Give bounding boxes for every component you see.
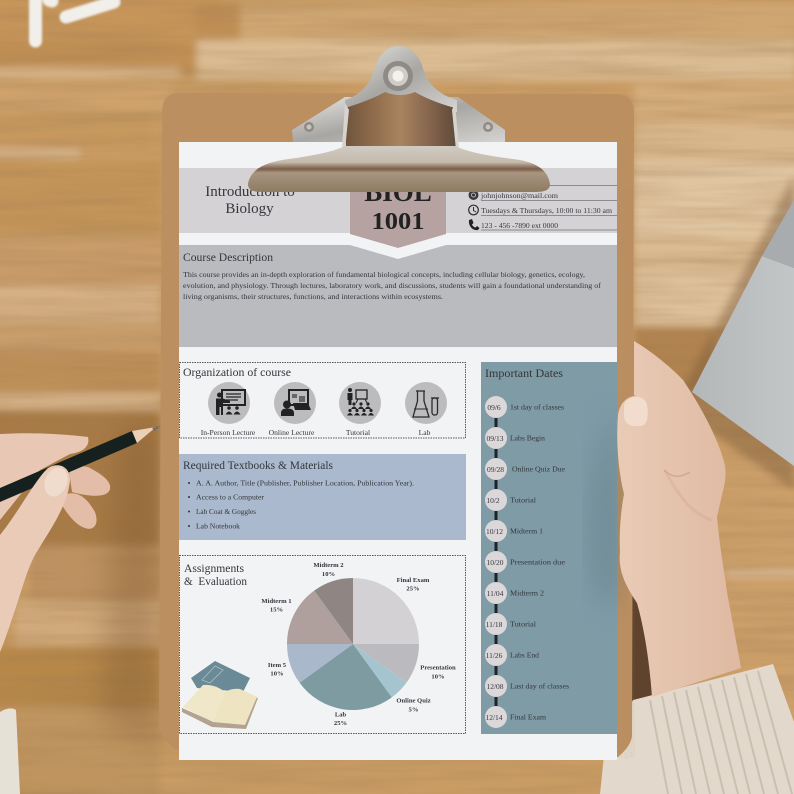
panel: required textbooks and materials xyxy=(179,454,466,540)
section heading: & Evaluation xyxy=(184,574,247,588)
date numbers: 12/08 xyxy=(486,682,504,691)
date labels: Final Exam xyxy=(510,712,546,722)
panel: course description xyxy=(179,245,617,347)
clip bar xyxy=(248,146,550,192)
icon: in-person lecture xyxy=(208,382,250,424)
sweater cuff left xyxy=(0,708,20,794)
icon labels: Tutorial xyxy=(346,428,370,437)
pie labels: 25% xyxy=(406,586,420,592)
pie labels: Item 5 xyxy=(268,662,287,669)
sweater sleeve right xyxy=(600,664,794,794)
icon: online lecture xyxy=(274,382,316,424)
date labels: Presentation due xyxy=(510,558,565,566)
section heading: Assignments xyxy=(184,561,244,575)
materials list: Lab Notebook xyxy=(196,522,240,530)
date numbers xyxy=(485,403,504,722)
date labels: Online Quiz Due xyxy=(512,464,565,474)
earbuds xyxy=(36,0,114,41)
clip wings xyxy=(292,97,505,142)
date labels: Midterm 2 xyxy=(510,588,544,598)
date numbers: 11/26 xyxy=(486,651,503,660)
pie labels: 10% xyxy=(270,670,284,678)
pie labels xyxy=(261,562,456,727)
panel: organization of course xyxy=(180,362,466,438)
date numbers: 10/20 xyxy=(486,558,504,567)
contact details: Tuesdays & Thursdays, 10:00 to 11:30 am xyxy=(481,206,612,215)
pie chart xyxy=(287,578,419,710)
materials list: Access to a Computer xyxy=(196,492,265,502)
pie labels: Online Quiz xyxy=(396,698,431,704)
pie labels: Final Exam xyxy=(397,577,430,584)
icon labels: In-Person Lecture xyxy=(201,428,256,437)
right hand xyxy=(617,341,741,697)
icon: clock xyxy=(469,205,478,215)
date labels: Labs End xyxy=(510,650,539,660)
date labels: Tutorial xyxy=(510,620,536,628)
pie labels: Presentation xyxy=(420,664,456,672)
date numbers: 09/13 xyxy=(486,434,504,443)
clipboard clip xyxy=(248,46,550,192)
pie labels: 10% xyxy=(322,571,335,578)
thumb shadow on panel xyxy=(594,405,617,610)
date numbers: 11/18 xyxy=(486,620,503,629)
pencil xyxy=(0,426,160,502)
course title: Introduction to xyxy=(205,184,295,200)
date labels: Last day of classes xyxy=(510,682,569,690)
left hand with pencil xyxy=(0,426,160,652)
description text: This course provides an in-depth exploration of fundamental biological concepts, including cellular biology, genetics, ecology, xyxy=(183,270,585,279)
pie labels: 15% xyxy=(270,606,283,614)
contact details xyxy=(468,186,617,230)
contact details: 123 - 456 -7890 ext 0000 xyxy=(481,221,558,230)
pie labels: Midterm 2 xyxy=(313,562,344,569)
materials list: A. A. Author, Title (Publisher, Publisher Location, Publication Year). xyxy=(196,478,414,488)
materials list xyxy=(188,478,414,530)
date numbers: 09/6 xyxy=(487,403,501,412)
clip handle ring xyxy=(345,46,457,112)
panel: required textbooks and materials: Required Textbooks & Materials xyxy=(183,458,333,472)
hand palm and fingers xyxy=(0,433,110,529)
course title xyxy=(205,184,295,217)
date numbers: 10/2 xyxy=(486,496,500,505)
course code pennant: 1001 xyxy=(372,209,424,235)
thumbnail xyxy=(624,397,648,426)
panel: organization of course: Organization of course xyxy=(183,365,291,379)
thumbnail left xyxy=(40,464,72,500)
paper sheet xyxy=(179,142,617,760)
course title: Biology xyxy=(225,201,274,217)
description text xyxy=(183,270,602,301)
materials list: Lab Coat & Goggles xyxy=(196,507,256,516)
date labels: 1st day of classes xyxy=(510,402,564,412)
header band xyxy=(179,168,617,233)
icon labels: Lab xyxy=(419,428,431,437)
contact details: johnjohnson@mail.com xyxy=(480,191,558,200)
date numbers: 11/04 xyxy=(487,589,504,598)
clipboard board xyxy=(159,93,635,758)
dark gap beside wrist xyxy=(630,590,670,710)
date labels: Midterm 1 xyxy=(510,526,543,536)
clip brown body xyxy=(345,92,456,150)
icon: lab flask xyxy=(405,382,447,424)
description text: living organisms, their structures, functions, and interactions within ecosystems. xyxy=(183,292,443,301)
date numbers: 12/14 xyxy=(485,713,503,722)
pie labels: Midterm 1 xyxy=(261,598,292,605)
course code pennant: BIOL xyxy=(364,177,432,207)
date numbers: 10/12 xyxy=(486,527,503,536)
icon: email xyxy=(468,190,478,200)
date numbers: 09/28 xyxy=(487,465,504,474)
icon labels: Online Lecture xyxy=(269,428,315,437)
pie labels: 5% xyxy=(409,706,418,714)
date labels: Labs Begin xyxy=(510,434,545,442)
icon: books xyxy=(182,661,258,729)
icon: phone xyxy=(469,219,480,230)
panel: important dates xyxy=(481,362,617,734)
pie labels: Lab xyxy=(335,712,347,718)
board shadow on desk xyxy=(100,420,160,745)
section heading xyxy=(184,561,247,588)
laptop xyxy=(672,175,794,490)
pie labels: 10% xyxy=(431,674,445,680)
description text: evolution, and physiology. Through lectures, laboratory work, and discussions, students will gain a foundational understanding of xyxy=(183,281,602,290)
date labels: Tutorial xyxy=(510,496,536,504)
icon labels xyxy=(201,428,431,437)
thumb xyxy=(0,465,70,652)
date labels xyxy=(510,402,569,722)
timeline dates xyxy=(485,396,507,728)
pie labels: 25% xyxy=(334,720,347,727)
course code pennant xyxy=(350,170,446,248)
panel: course description: Course Description xyxy=(183,250,273,264)
icon: tutorial xyxy=(339,382,381,424)
panel: important dates: Important Dates xyxy=(485,366,563,380)
timeline connector xyxy=(494,407,498,717)
panel: assignments and evaluation xyxy=(180,556,466,734)
